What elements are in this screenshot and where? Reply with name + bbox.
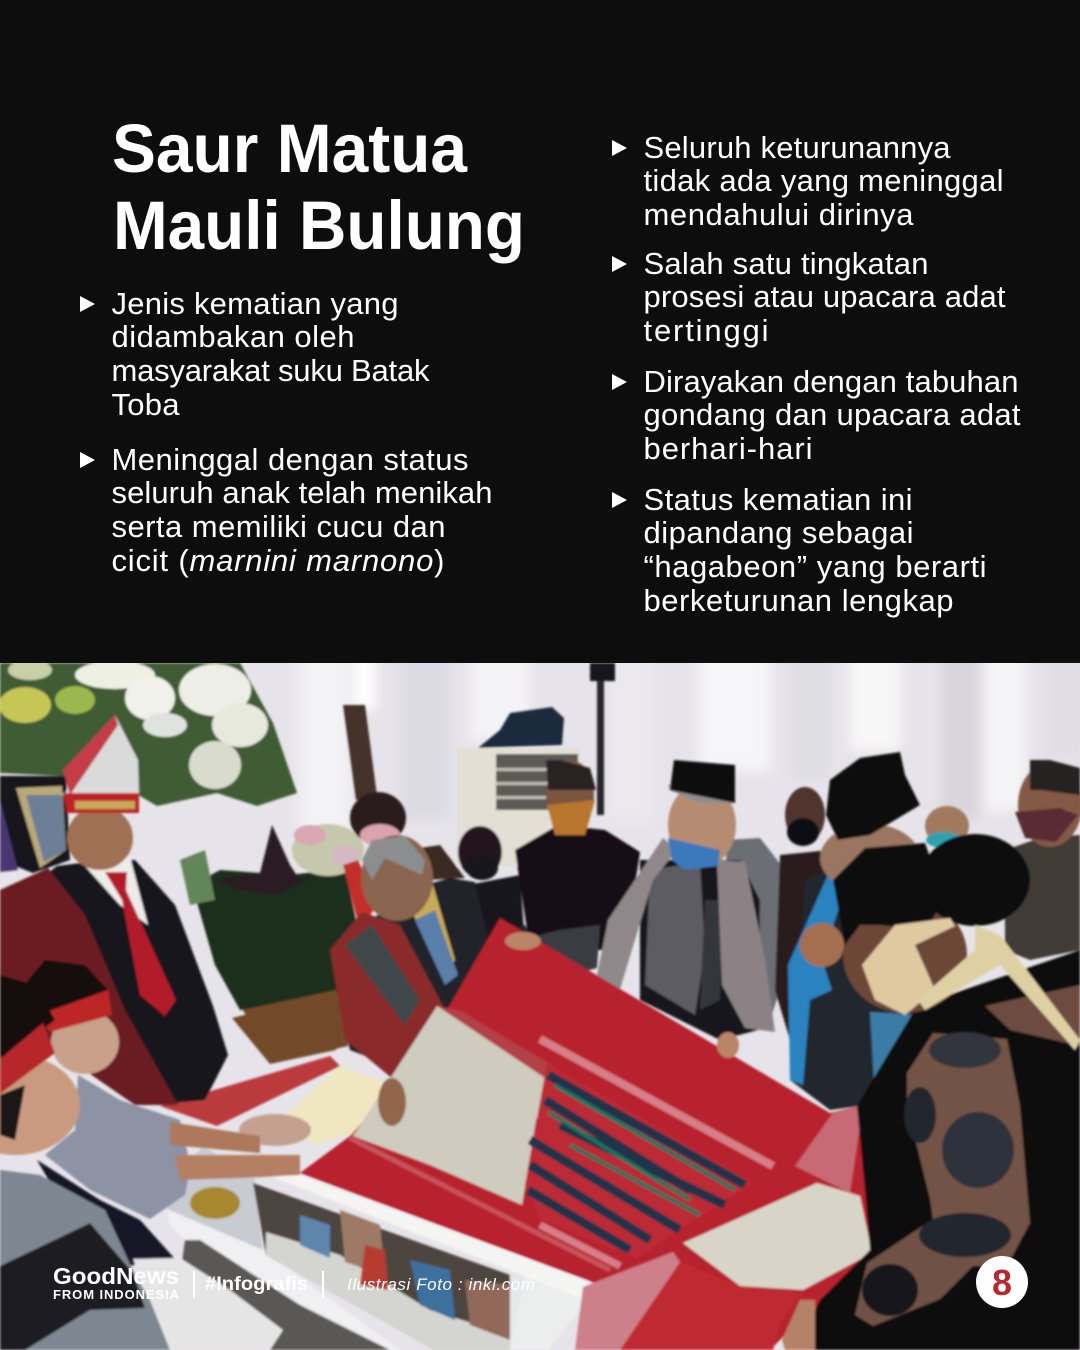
last supper panel xyxy=(253,1183,510,1350)
bullet: Jenis kematian: masyarakat suku Batak xyxy=(112,353,430,388)
songket corner top xyxy=(795,1104,863,1193)
bullet: Seluruh keturunannya: mendahului dirinya xyxy=(644,197,914,232)
title: Mauli Bulung xyxy=(113,187,525,264)
footer divider xyxy=(322,1271,324,1298)
bullet: Salah satu xyxy=(612,246,1006,348)
front woman face xyxy=(0,1055,80,1155)
bullet: Dirayakan: Dirayakan dengan tabuhan xyxy=(644,364,1018,399)
woman in black mask behind xyxy=(775,787,840,1040)
page number badge: 8 xyxy=(992,1262,1012,1303)
arms xyxy=(170,1122,260,1153)
man in grey jacket behind xyxy=(725,838,790,1020)
bullet: Salah satu: tertinggi xyxy=(644,313,768,348)
AC unit xyxy=(457,748,580,866)
picture frame xyxy=(0,776,70,873)
curtain backdrop xyxy=(0,640,1080,1350)
lace sleeve xyxy=(907,1033,1030,1266)
man in black shirt xyxy=(515,760,640,950)
face xyxy=(843,897,967,1013)
lower red fold xyxy=(612,1259,803,1350)
top rail of coffin xyxy=(268,1168,590,1300)
bullet: Seluruh keturunannya: Seluruh keturunannya xyxy=(644,130,951,165)
hair and bun xyxy=(833,843,945,945)
photo credit: Ilustrasi Foto : inkl.com xyxy=(347,1275,535,1294)
bullet: Meninggal: Meninggal dengan status xyxy=(112,442,468,477)
man with peci and ulos xyxy=(540,760,775,1040)
camera stand xyxy=(590,663,615,815)
back woman xyxy=(51,1010,119,1074)
bullet: Jenis kematian xyxy=(80,286,430,422)
footer logo: GoodNews From Indonesia: FROM INDONESIA xyxy=(53,1287,180,1302)
bullet: Meninggal: cicit (marnini marnono) xyxy=(112,543,444,578)
satin lining xyxy=(280,1066,385,1145)
footer tag: #Infografis xyxy=(205,1274,308,1295)
man with black peci right xyxy=(788,752,925,1110)
navy dress xyxy=(37,1160,175,1270)
bullet: Seluruh keturunannya xyxy=(612,130,1004,232)
footer divider xyxy=(193,1271,195,1298)
gold ornament xyxy=(190,1187,240,1219)
bullet: Meninggal: seluruh anak telah menikah xyxy=(112,475,492,510)
title xyxy=(112,110,525,264)
woman in pink mask xyxy=(350,792,465,880)
woman front right in black lace xyxy=(782,834,1080,1350)
standing man left xyxy=(0,715,228,1105)
man bowing with scarf xyxy=(330,835,540,1085)
bullet: Jenis kematian: Toba xyxy=(112,387,180,422)
flower arrangement xyxy=(0,660,297,806)
women front left xyxy=(0,960,300,1350)
bullet: Jenis kematian: Jenis kematian yang xyxy=(112,286,398,321)
left text column xyxy=(80,286,492,578)
woman in black mask xyxy=(458,826,525,945)
bullet: Meninggal: serta memiliki cucu dan xyxy=(112,509,446,544)
upper shoulder xyxy=(985,985,1080,1046)
lower white songket xyxy=(683,1183,872,1290)
deceased, pillow and coffin xyxy=(160,1056,583,1350)
striped panel xyxy=(525,1063,753,1259)
footer logo: GoodNews From Indonesia: GoodNews xyxy=(53,1263,179,1289)
red ulos cloth xyxy=(268,918,880,1350)
red shawl on coffin edge xyxy=(160,1056,340,1126)
veil xyxy=(133,1258,283,1350)
bullet: Dirayakan: berhari-hari xyxy=(644,431,812,466)
wooden panel xyxy=(343,705,377,800)
footer logo: GoodNews From Indonesia xyxy=(53,1263,180,1302)
floor xyxy=(170,1240,390,1350)
bullet: Salah satu: Salah satu tingkatan xyxy=(644,246,928,281)
right text column xyxy=(612,130,1021,618)
photo: funeral ceremony xyxy=(0,640,1080,1350)
bullet: Status kematian xyxy=(612,482,986,618)
bullet: Status kematian: “hagabeon” yang berarti xyxy=(644,549,986,584)
bullet: Seluruh keturunannya: tidak ada yang meninggal xyxy=(644,163,1004,198)
bullet: Meninggal xyxy=(80,442,492,578)
cream mask xyxy=(862,918,955,1015)
hand xyxy=(782,1300,815,1350)
bag on AC xyxy=(478,707,564,748)
front woman body xyxy=(0,1170,180,1350)
bullet: Status kematian: dipandang sebagai xyxy=(644,515,914,550)
title: Saur Matua xyxy=(112,110,468,187)
bullet: Dirayakan: gondang dan upacara adat xyxy=(644,397,1021,432)
hand on cloth xyxy=(717,1032,739,1058)
bullet: Jenis kematian: didambakan oleh xyxy=(112,319,354,354)
basket xyxy=(243,990,336,1064)
potted plant xyxy=(180,824,364,1064)
patterned songket panel xyxy=(353,1006,552,1205)
hand of man with ulos xyxy=(505,932,541,950)
hand of bowing man xyxy=(378,1078,406,1126)
bullet: Status kematian: berketurunan lengkap xyxy=(644,583,954,618)
page number badge xyxy=(976,1256,1028,1308)
lace blouse xyxy=(45,1075,190,1219)
bullet: Dirayakan xyxy=(612,364,1021,466)
bullet: Salah satu: prosesi atau upacara adat xyxy=(644,279,1006,314)
coffin side xyxy=(167,1146,263,1254)
man far right xyxy=(1005,760,1080,960)
woman with teal mask xyxy=(925,806,969,848)
bullet: Status kematian: Status kematian ini xyxy=(644,482,912,517)
